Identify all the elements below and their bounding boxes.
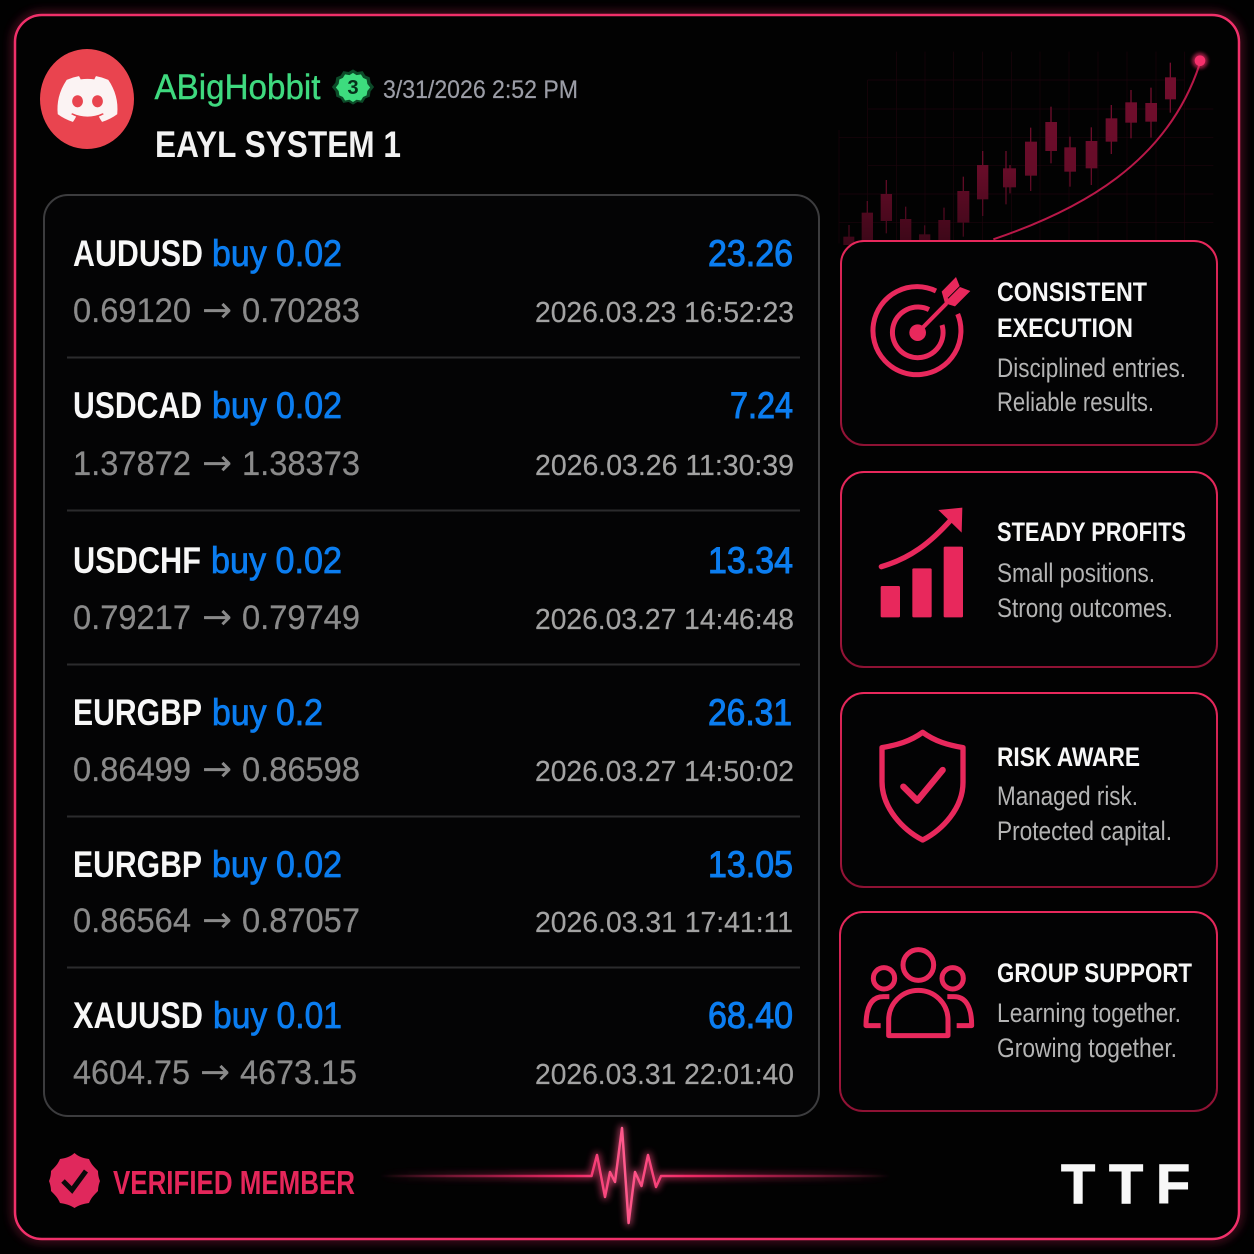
panel: trades xyxy=(44,195,819,1116)
trade row: AUDUSD: AUDUSD xyxy=(73,233,203,274)
trade row: USDCAD: 7.24 xyxy=(730,385,793,426)
heartbeat line xyxy=(380,1128,890,1223)
trade row: AUDUSD xyxy=(73,233,794,331)
trade row: USDCAD: 1.38373 xyxy=(242,445,360,483)
heading line 2: EXECUTION xyxy=(997,313,1133,343)
trade row: AUDUSD: buy 0.02 xyxy=(212,233,342,274)
header: avatar xyxy=(40,49,134,149)
trade row: EURGBP 0.2: 0.86499 xyxy=(73,751,191,789)
trade row: XAUUSD: 4604.75 xyxy=(73,1054,190,1092)
trade row: XAUUSD: → xyxy=(200,1052,230,1093)
trade row: XAUUSD: 2026.03.31 22:01:40 xyxy=(535,1059,794,1091)
icon: discord logo xyxy=(57,76,118,122)
panel: steady profits xyxy=(841,472,1217,667)
description line 2: Strong outcomes. xyxy=(997,593,1173,623)
trade row: AUDUSD: 0.69120 xyxy=(73,292,191,330)
heading: RISK AWARE xyxy=(997,742,1140,772)
description line 2: Growing together. xyxy=(997,1033,1177,1063)
trade row: EURGBP 0.02: buy 0.02 xyxy=(212,844,342,885)
trade row: EURGBP 0.2: 2026.03.27 14:50:02 xyxy=(535,756,794,788)
description line 2: Reliable results. xyxy=(997,387,1154,417)
trade row: USDCAD: → xyxy=(202,443,232,484)
panel: consistent execution xyxy=(841,241,1217,445)
timestamp: 3/31/2026 2:52 PM xyxy=(383,76,578,104)
trade row: EURGBP 0.02 xyxy=(73,844,793,941)
trade row: AUDUSD: 23.26 xyxy=(708,233,793,274)
trade row: EURGBP 0.2: buy 0.2 xyxy=(212,692,323,733)
trade row: EURGBP 0.02: 0.86564 xyxy=(73,902,191,940)
icon: level badge 3: 3 xyxy=(347,77,359,99)
icon: target with arrow xyxy=(873,277,970,375)
description: Learning together. xyxy=(997,998,1181,1028)
icon: group of people xyxy=(866,950,972,1036)
trade row: USDCHF xyxy=(73,540,794,638)
trade row: EURGBP 0.02: 13.05 xyxy=(708,844,793,885)
trade row: USDCAD: buy 0.02 xyxy=(212,385,342,426)
trade row: USDCHF: 0.79749 xyxy=(242,599,360,637)
trade row: USDCAD: 1.37872 xyxy=(73,445,191,483)
trade row: EURGBP 0.2: → xyxy=(202,749,232,790)
icon: verified badge xyxy=(49,1153,100,1208)
trade row: EURGBP 0.02: EURGBP xyxy=(73,844,202,885)
trade row: USDCAD xyxy=(73,385,794,484)
trade row: EURGBP 0.2 xyxy=(73,692,794,790)
description: Managed risk. xyxy=(997,781,1138,811)
trade row: EURGBP 0.02: 0.87057 xyxy=(242,902,360,940)
trade row: AUDUSD: 0.70283 xyxy=(242,292,360,330)
trade row: XAUUSD: XAUUSD xyxy=(73,995,203,1036)
trade row: USDCHF: buy 0.02 xyxy=(211,540,342,581)
trade row: USDCAD: 2026.03.26 11:30:39 xyxy=(535,450,794,482)
verified label: VERIFIED MEMBER xyxy=(113,1164,355,1201)
trade row: EURGBP 0.02: 2026.03.31 17:41:11 xyxy=(535,907,793,939)
trade row: EURGBP 0.2: 26.31 xyxy=(708,692,792,733)
description: Disciplined entries. xyxy=(997,353,1186,383)
trade row: EURGBP 0.2: EURGBP xyxy=(73,692,202,733)
trade row: XAUUSD xyxy=(73,995,794,1093)
title: EAYL SYSTEM 1 xyxy=(155,124,401,165)
icon: rising bars xyxy=(881,508,963,617)
icon: level badge 3 xyxy=(332,69,374,105)
trade row: XAUUSD: buy 0.01 xyxy=(213,995,342,1036)
username: ABigHobbit xyxy=(154,68,321,107)
trade row: USDCHF: 13.34 xyxy=(708,540,793,581)
description line 2: Protected capital. xyxy=(997,816,1172,846)
trade row: USDCHF: → xyxy=(202,597,232,638)
trade row: XAUUSD: 68.40 xyxy=(708,995,793,1036)
heading: GROUP SUPPORT xyxy=(997,958,1192,988)
heading: CONSISTENT xyxy=(997,277,1147,307)
trade row: USDCAD: USDCAD xyxy=(73,385,202,426)
icon: shield with check xyxy=(882,732,963,840)
trade row: AUDUSD: → xyxy=(202,290,232,331)
trade row: USDCHF: USDCHF xyxy=(73,540,201,581)
trade row: USDCHF: 2026.03.27 14:46:48 xyxy=(535,604,794,636)
panel: group support xyxy=(840,912,1217,1111)
trade row: AUDUSD: 2026.03.23 16:52:23 xyxy=(535,297,794,329)
candlestick chart xyxy=(839,52,1213,245)
TTF logo: TTF xyxy=(1061,1152,1190,1215)
trade row: XAUUSD: 4673.15 xyxy=(240,1054,357,1092)
heading: STEADY PROFITS xyxy=(997,517,1186,547)
trade row: USDCHF: 0.79217 xyxy=(73,599,191,637)
trade row: EURGBP 0.2: 0.86598 xyxy=(242,751,360,789)
description: Small positions. xyxy=(997,558,1155,588)
trade row: EURGBP 0.02: → xyxy=(202,900,232,941)
panel: risk aware xyxy=(841,693,1217,887)
